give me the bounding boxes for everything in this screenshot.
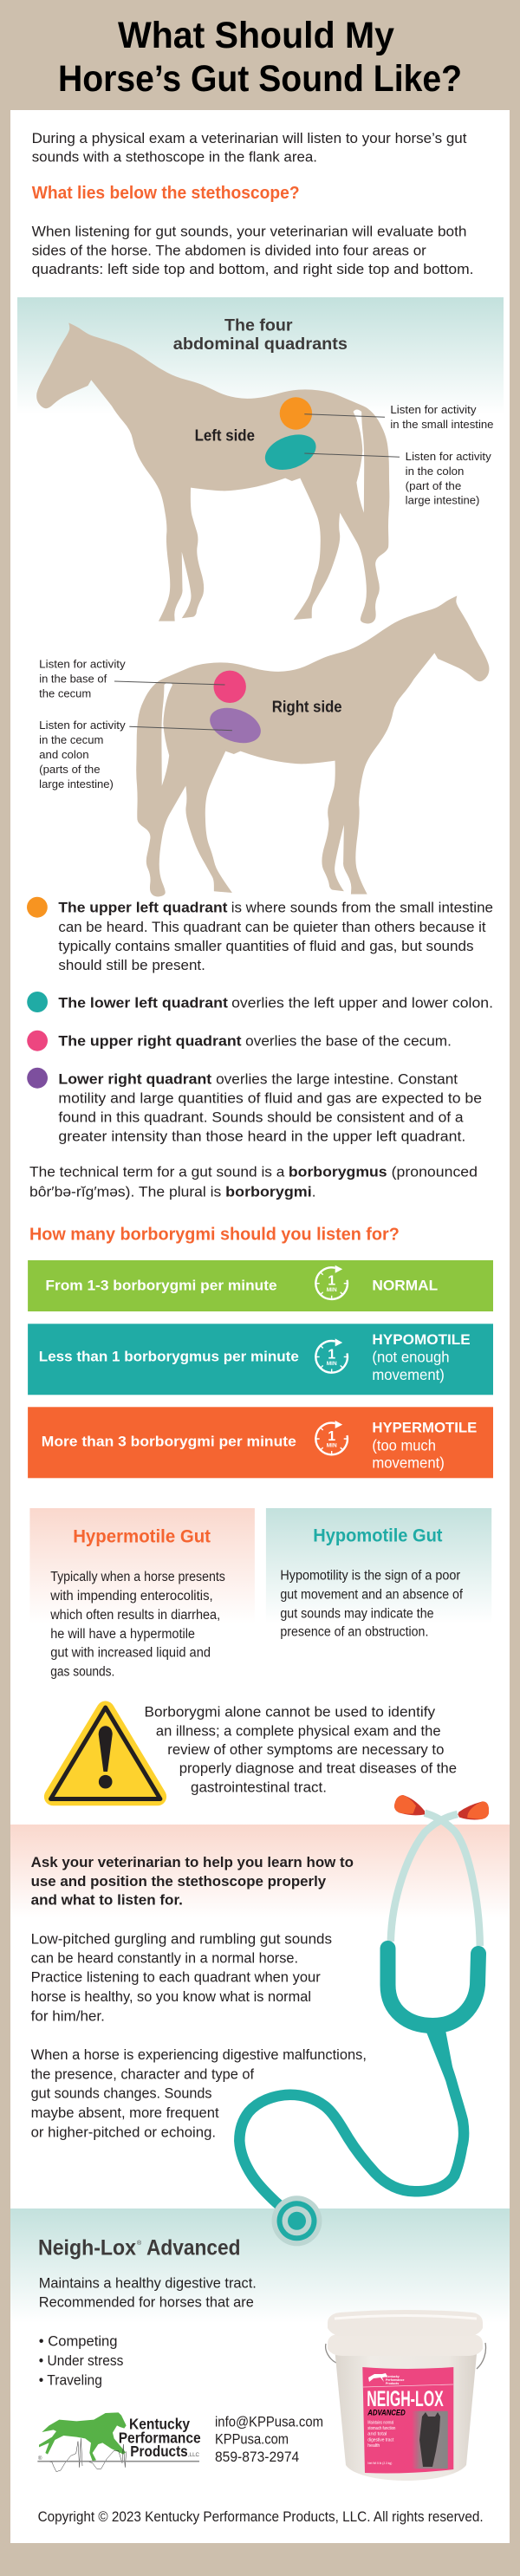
quadrant legend: lower right: motility and large quantities of fluid and gas are expected to be <box>58 1090 482 1107</box>
recommended list: • Competing <box>39 2333 117 2350</box>
icon: one minute timer: MIN <box>327 1361 337 1367</box>
quadrant legend: upper right: The upper right quadrant <box>58 1033 242 1050</box>
bullet: orange <box>27 897 48 918</box>
logo horse <box>37 2412 199 2472</box>
heading: what lies below the stethoscope: What lies below the stethoscope? <box>32 184 300 203</box>
recommended list <box>39 2333 123 2388</box>
panel: ask your veterinarian: When a horse is experiencing digestive malfunctions, <box>31 2046 367 2063</box>
product heading: ® <box>137 2240 142 2247</box>
bucket lower rim <box>328 2334 483 2356</box>
bar: hypomotile rate: (not enough <box>372 1349 450 1366</box>
bar: normal rate: From 1-3 borborygmi per minute <box>45 1278 277 1294</box>
icon: one minute timer: 1 <box>328 1347 335 1362</box>
panel: ask your veterinarian: use and position the stethoscope properly <box>31 1873 327 1890</box>
contact details: 859-873-2974 <box>215 2449 299 2465</box>
bucket handle <box>326 2343 486 2369</box>
bar: hypermotile rate: (too much <box>372 1436 436 1454</box>
quadrant legend: upper left: is where sounds from the small intestine <box>231 900 493 916</box>
intro text: sounds with a stethoscope in the flank area. <box>32 149 317 166</box>
title: What Should My <box>118 15 394 56</box>
warning text: gastrointestinal tract. <box>191 1779 327 1795</box>
bar: hypomotile rate: movement) <box>372 1366 445 1383</box>
logo: Kentucky Performance Products: Products <box>130 2443 188 2460</box>
warning text: review of other symptoms are necessary to <box>167 1741 444 1758</box>
label: claims: digestive tract <box>367 2437 394 2443</box>
label: small logo: Products <box>386 2382 399 2385</box>
label: claims: Net Wt 5 lb (2.3 kg) <box>367 2462 392 2465</box>
panel: ask your veterinarian: maybe absent, more frequent <box>31 2104 219 2121</box>
logo baseline <box>37 2459 199 2463</box>
text: evaluating both sides: sides of the horse. The abdomen is divided into four areas or <box>32 242 426 258</box>
marker: lower left quadrant <box>260 428 321 477</box>
bucket lid <box>328 2310 483 2336</box>
label: claims: health <box>367 2443 380 2449</box>
label: claims: stomach function <box>367 2426 395 2431</box>
icon: one minute timer: 1 <box>328 1274 335 1289</box>
icon: one minute timer <box>315 1338 348 1373</box>
panel: ask your veterinarian: the presence, character and type of <box>31 2065 254 2082</box>
intro text: During a physical exam a veterinarian will listen to your horse’s gut <box>32 130 467 146</box>
panel: ask your veterinarian: or higher-pitched or echoing. <box>31 2124 216 2140</box>
text: technical term borborygmus: bôr′bə-rĭg′məs). The plural is <box>29 1183 221 1200</box>
quadrant legend: upper right: overlies the base of the cecum. <box>245 1033 452 1050</box>
quadrant legend: lower left <box>27 992 493 1012</box>
intro text <box>32 130 467 166</box>
text: technical term borborygmus: borborygmus <box>289 1164 387 1181</box>
bullet: pink <box>27 1031 48 1051</box>
horse silhouette: right side <box>136 595 489 896</box>
label <box>362 2367 453 2474</box>
panel: ask your veterinarian: gut sounds changes. Sounds <box>31 2085 211 2102</box>
panel: hypermotile gut <box>29 1508 255 1680</box>
callout: base of the cecum: the cecum <box>39 686 91 699</box>
quadrant legend: upper left: can be heard. This quadrant can be quieter than others because it <box>58 919 486 935</box>
panel: ask your veterinarian: horse is healthy, so you know what is normal <box>31 1988 311 2005</box>
text: technical term borborygmus: . <box>312 1183 315 1200</box>
bullet: teal <box>27 992 48 1012</box>
quadrant legend: upper left <box>27 897 493 973</box>
callout: cecum and colon: (parts of the <box>39 763 101 776</box>
bullet: purple <box>27 1068 48 1089</box>
callout: colon <box>406 450 491 507</box>
icon: one minute timer <box>315 1265 348 1299</box>
tubing <box>239 2034 464 2221</box>
recommended list: • Traveling <box>39 2371 102 2388</box>
label: right side: Right side <box>272 698 342 716</box>
callout: cecum and colon: large intestine) <box>39 777 114 790</box>
bucket body <box>335 2354 477 2481</box>
marker: upper left quadrant <box>280 397 312 430</box>
bar: normal rate <box>28 1260 493 1311</box>
text: evaluating both sides: When listening for gut sounds, your veterinarian will evaluate both <box>32 224 466 240</box>
callout: base of the cecum: Listen for activity <box>39 657 126 670</box>
bar: hypermotile rate: HYPERMOTILE <box>372 1420 477 1436</box>
panel: hypermotile gut: gut with increased liquid and <box>50 1646 211 1661</box>
ear tip left <box>394 1795 425 1815</box>
text: technical term borborygmus: The technical term for a gut sound is a <box>29 1164 285 1181</box>
callout: small intestine: in the small intestine <box>390 418 494 431</box>
panel: ask your veterinarian: can be heard constantly in a normal horse. <box>31 1949 298 1966</box>
product description: Maintains a healthy digestive tract. <box>39 2274 257 2291</box>
quadrant legend: lower right: Lower right quadrant <box>58 1070 212 1087</box>
icon: one minute timer: MIN <box>327 1442 337 1449</box>
callout: small intestine: Listen for activity <box>390 403 477 416</box>
quadrant legend: lower left: overlies the left upper and lower colon. <box>231 995 493 1012</box>
product image: Neigh-Lox bucket <box>326 2310 486 2481</box>
icon: one minute timer: 1 <box>328 1429 335 1444</box>
logo heartbeat wave <box>48 2438 127 2472</box>
callout: cecum and colon <box>39 719 126 790</box>
label: product name: NEIGH-LOX <box>367 2387 444 2411</box>
panel heading <box>173 316 348 354</box>
marker: upper right quadrant <box>214 671 246 703</box>
quadrant legend: lower right: overlies the large intestine. Constant <box>216 1070 458 1087</box>
logo: Kentucky Performance Products <box>37 2412 201 2472</box>
callout: cecum and colon: and colon <box>39 748 89 761</box>
quadrant legend: upper left: should still be present. <box>58 957 205 973</box>
product description <box>39 2274 257 2311</box>
headset <box>388 1948 478 2026</box>
text: evaluating both sides: quadrants: left side top and bottom, and right side top and bottom. <box>32 261 473 277</box>
warning text <box>144 1703 457 1795</box>
bar: hypomotile rate: HYPOMOTILE <box>372 1331 471 1348</box>
lid highlight <box>335 2316 477 2319</box>
panel: Neigh-Lox Advanced background <box>10 2208 510 2323</box>
callout: colon: large intestine) <box>406 494 479 507</box>
label photo <box>412 2411 448 2469</box>
logo: Kentucky Performance Products: ,LLC <box>188 2453 200 2458</box>
heading: how many borborygmi: How many borborygmi should you listen for? <box>29 1225 400 1244</box>
panel: ask your veterinarian: Practice listening to each quadrant when your <box>31 1969 321 1986</box>
ear tube left <box>425 1813 480 1946</box>
copyright: Copyright © 2023 Kentucky Performance Products, LLC. All rights reserved. <box>38 2508 484 2525</box>
ear tip right <box>458 1801 489 1819</box>
panel: hypermotile gut: which often results in diarrhea, <box>49 1608 220 1623</box>
bar: hypomotile rate: Less than 1 borborygmus per minute <box>39 1349 299 1365</box>
marker: lower right quadrant <box>205 701 265 750</box>
product description: Recommended for horses that are <box>39 2294 254 2311</box>
ear tube right <box>391 1814 458 1942</box>
callout: colon: in the colon <box>406 465 464 478</box>
warning text: properly diagnose and treat diseases of the <box>179 1760 457 1777</box>
leader line: cecum and colon <box>129 726 232 731</box>
callout: cecum and colon: Listen for activity <box>39 719 126 732</box>
product heading <box>38 2235 241 2260</box>
icon: one minute timer <box>315 1421 348 1454</box>
panel heading: abdominal quadrants <box>173 335 348 354</box>
panel: hypomotile gut: gut sounds may indicate the <box>280 1606 434 1621</box>
panel: ask your veterinarian: for him/her. <box>31 2007 105 2024</box>
panel: hypermotile gut: with impending enterocolitis, <box>49 1589 213 1603</box>
leader line: colon <box>304 453 400 457</box>
callout: colon: Listen for activity <box>406 450 491 463</box>
warning text: Borborygmi alone cannot be used to identify <box>144 1703 436 1720</box>
product heading: Neigh-Lox <box>38 2235 136 2260</box>
contact details: KPPusa.com <box>215 2431 289 2448</box>
panel: hypermotile gut: gas sounds. <box>50 1665 114 1680</box>
title: Horse’s Gut Sound Like? <box>58 58 462 100</box>
callout: cecum and colon: in the cecum <box>39 733 103 746</box>
callout: colon: (part of the <box>406 479 461 492</box>
bar: normal rate: NORMAL <box>372 1278 438 1294</box>
leader line: base of cecum <box>114 681 225 685</box>
quadrant legend: lower left: The lower left quadrant <box>58 995 228 1012</box>
icon: warning triangle <box>50 1708 160 1799</box>
panel: hypermotile gut: Hypermotile Gut <box>73 1526 211 1546</box>
logo: Kentucky Performance Products: Kentucky <box>129 2416 190 2433</box>
panel: hypomotile gut <box>266 1508 491 1639</box>
quadrant legend: upper right <box>27 1031 452 1051</box>
text: technical term borborygmus: borborygmi <box>225 1183 312 1200</box>
illustration: stethoscope <box>239 1795 489 2246</box>
quadrant legend: upper left: The upper left quadrant <box>58 900 228 916</box>
panel: hypomotile gut: gut movement and an absence of <box>280 1587 464 1602</box>
panel: hypermotile gut: Typically when a horse presents <box>50 1570 225 1584</box>
text: technical term borborygmus: (pronounced <box>392 1164 478 1181</box>
leader line: small intestine <box>304 414 385 417</box>
icon: one minute timer: MIN <box>327 1287 337 1293</box>
label: claims: Maintains normal <box>367 2420 393 2425</box>
label: advanced: ADVANCED <box>367 2409 406 2417</box>
bar: hypermotile rate: More than 3 borborygmi per minute <box>42 1434 296 1450</box>
callout: base of the cecum: in the base of <box>39 672 107 685</box>
panel: hypomotile gut: Hypomotility is the sign of a poor <box>280 1568 460 1583</box>
label: small logo: Performance <box>386 2378 404 2382</box>
warning text: an illness; a complete physical exam and the <box>156 1722 441 1739</box>
callout: base of the cecum <box>39 657 126 699</box>
panel: hypomotile gut: Hypomotile Gut <box>313 1525 442 1545</box>
text: evaluating both sides <box>32 224 473 277</box>
product heading: Advanced <box>146 2235 241 2260</box>
chest piece <box>272 2195 322 2246</box>
quadrant legend: lower right: greater intensity than those heard in the upper left quadrant. <box>58 1128 465 1144</box>
panel heading: The four <box>224 316 293 335</box>
panel: ask your veterinarian: Low-pitched gurgling and rumbling gut sounds <box>31 1930 332 1947</box>
panel: ask your veterinarian <box>10 1825 510 2140</box>
panel: ask your veterinarian: and what to listen for. <box>31 1892 183 1909</box>
logo: Kentucky Performance Products: Performance <box>119 2429 201 2446</box>
bar: hypomotile rate <box>28 1324 493 1395</box>
photo: horse head <box>419 2412 440 2467</box>
label: left side: Left side <box>195 426 255 444</box>
panel: four abdominal quadrants <box>17 297 504 896</box>
panel: ask your veterinarian: Ask your veterinarian to help you learn how to <box>31 1854 354 1870</box>
bar: hypermotile rate: movement) <box>372 1454 445 1472</box>
label: small logo: Kentucky <box>386 2375 400 2378</box>
panel: hypermotile gut: he will have a hypermotile <box>50 1627 195 1642</box>
quadrant legend: lower right <box>27 1068 482 1144</box>
quadrant legend: lower right: found in this quadrant. Sounds should be consistent and of a <box>58 1109 464 1125</box>
label: claims: and total <box>367 2432 387 2437</box>
recommended list: • Under stress <box>39 2352 123 2369</box>
contact details: info@KPPusa.com <box>215 2413 323 2430</box>
tubing stem <box>426 2030 455 2080</box>
logo: Kentucky Performance Products: ® <box>38 2456 42 2462</box>
label: divider <box>363 2384 453 2387</box>
callout: small intestine <box>390 403 494 431</box>
label: claims <box>367 2420 395 2465</box>
panel: hypomotile gut: presence of an obstruction. <box>280 1624 428 1639</box>
label: small logo <box>368 2373 404 2385</box>
horse silhouette: left side <box>36 322 389 623</box>
bar: hypermotile rate <box>28 1407 493 1478</box>
contact details <box>215 2413 323 2465</box>
title <box>58 15 462 100</box>
text: technical term borborygmus <box>29 1164 478 1200</box>
quadrant legend: upper left: typically contains smaller quantities of fluid and gas, but sounds <box>58 938 474 954</box>
panel gradient background <box>17 297 504 414</box>
